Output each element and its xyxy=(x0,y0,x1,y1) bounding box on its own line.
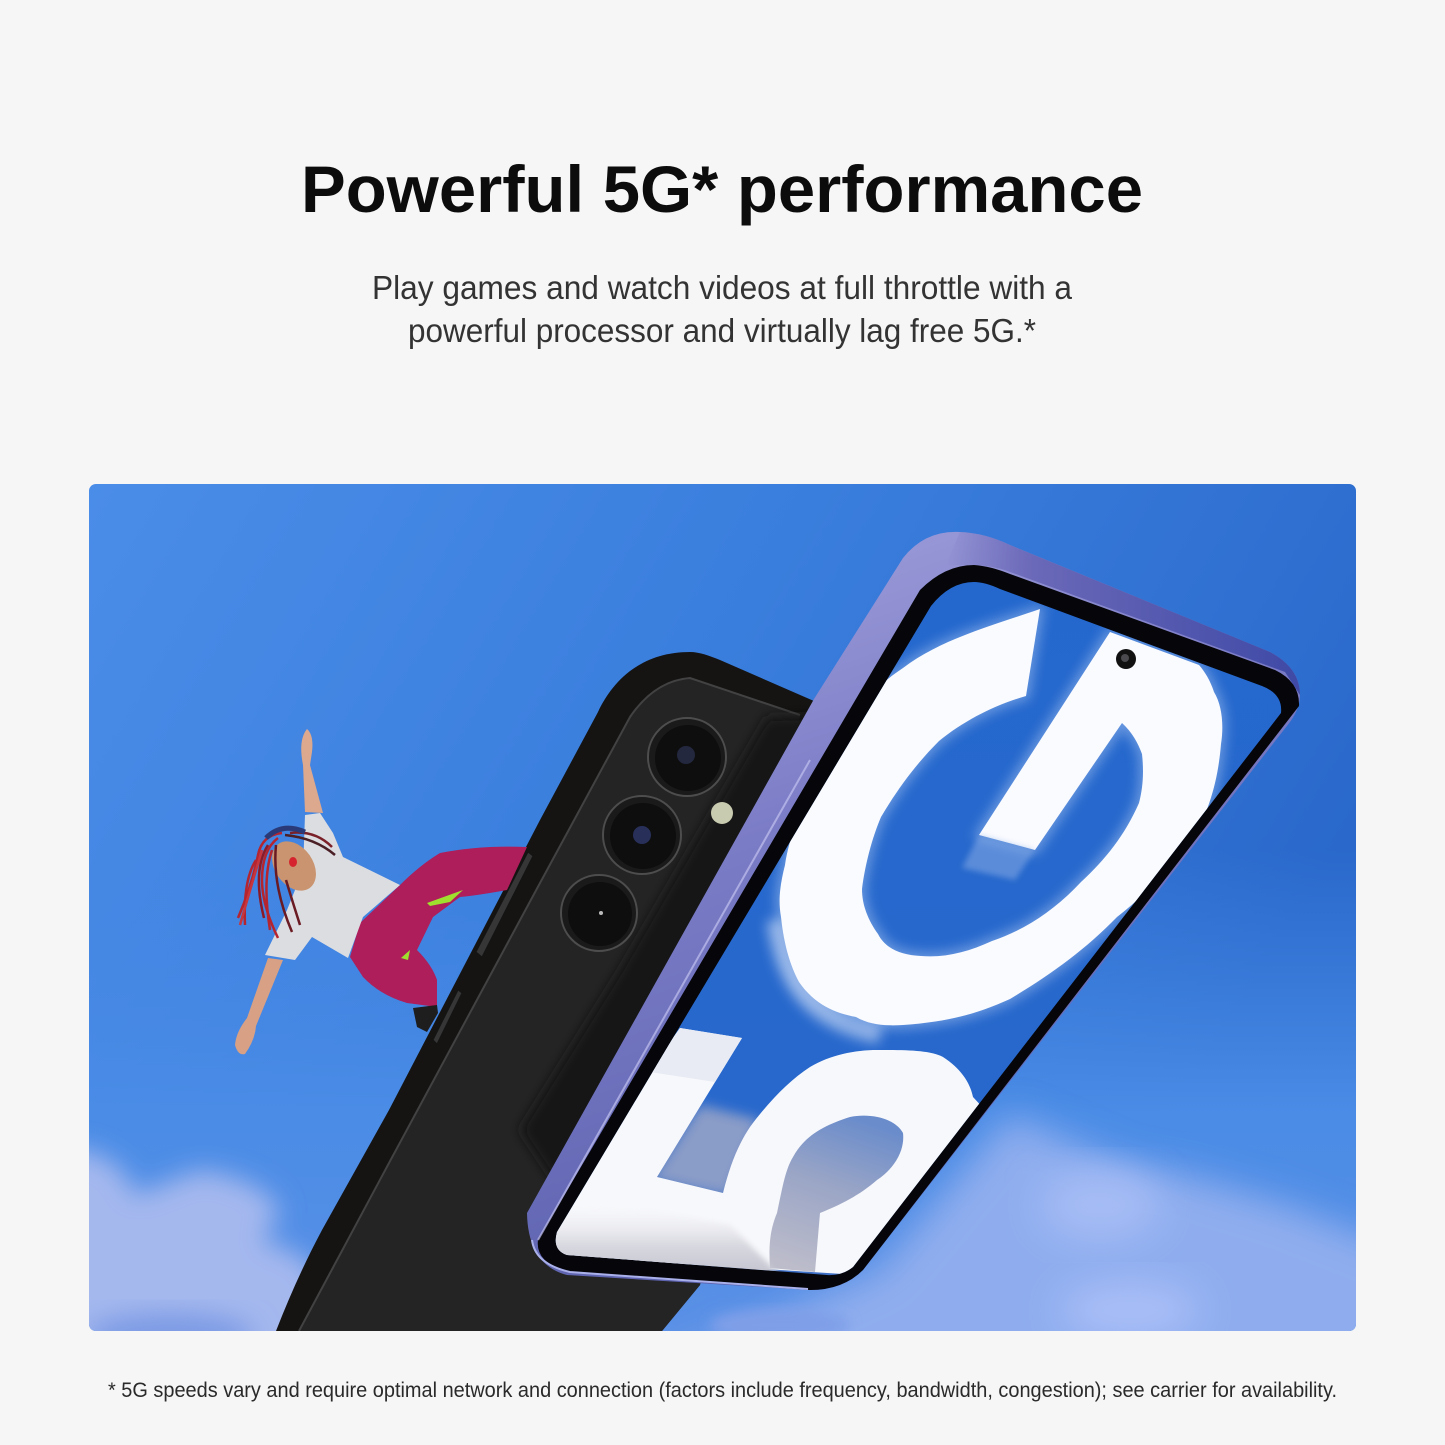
grey base of screen xyxy=(556,1212,782,1272)
reflection under G bar xyxy=(962,835,1035,880)
subtitle text block: Play games and watch videos at full throttle with a xyxy=(372,269,1073,306)
title: Powerful 5G* performance xyxy=(301,152,1143,226)
panel: sky photo with phones xyxy=(89,484,1356,1331)
camera 2 xyxy=(603,796,681,874)
raised arm xyxy=(301,729,323,813)
person jumping xyxy=(235,729,527,1054)
subtitle text block xyxy=(372,269,1073,349)
giant G xyxy=(780,609,1222,1025)
camera 1 xyxy=(648,718,726,796)
top band shading of 5 xyxy=(650,1028,742,1082)
footnote: * 5G speeds vary and require optimal network and connection (factors include frequency, bandwidth, congestion); see carrier for availability. xyxy=(108,1379,1337,1402)
green accents xyxy=(427,890,463,906)
screen xyxy=(556,582,1282,1276)
front camera xyxy=(1116,649,1136,669)
head xyxy=(272,841,316,891)
grey-blue shading behind 5 xyxy=(650,1105,760,1197)
glow around giant G xyxy=(780,609,1222,1025)
phone back xyxy=(276,652,835,1331)
dark strip beside frame with soft patch xyxy=(520,710,800,1177)
subtitle text block: powerful processor and virtually lag free 5G.* xyxy=(408,312,1036,349)
lilac highlight edge xyxy=(532,1240,808,1289)
frame top edge tint xyxy=(945,532,1300,695)
shirt xyxy=(265,813,400,960)
numeral 5 xyxy=(540,1028,985,1275)
plate contour line xyxy=(299,678,800,1331)
flash xyxy=(711,802,733,824)
clouds xyxy=(40,1115,1400,1380)
side buttons xyxy=(433,852,533,1044)
camera 3 xyxy=(561,875,637,951)
purple frame xyxy=(527,532,1300,1290)
sunglasses xyxy=(289,857,297,867)
trousers xyxy=(350,847,527,1007)
phone front xyxy=(520,532,1320,1290)
shoe xyxy=(413,1005,438,1032)
lower arm xyxy=(235,958,283,1054)
black bezel xyxy=(538,565,1299,1290)
infographic canvas xyxy=(89,164,1356,1402)
hair xyxy=(238,828,335,938)
5 bowl xyxy=(769,1116,903,1272)
lower-left G glow xyxy=(775,920,880,1035)
back plate xyxy=(299,678,800,1331)
